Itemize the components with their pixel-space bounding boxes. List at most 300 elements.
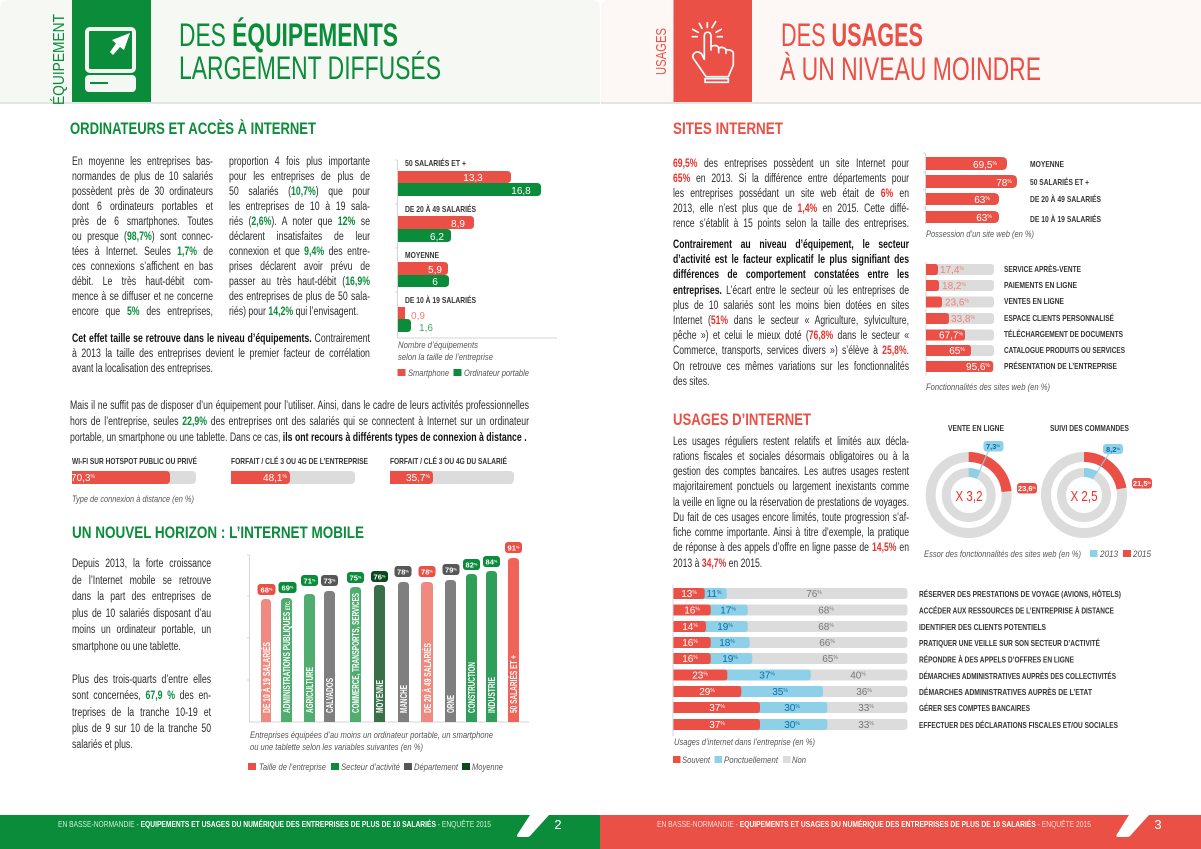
bar chart: équipements par taille: 0,9 [411,311,425,322]
row 9: % [720,721,725,727]
bar chart: fonctionnalités des sites web: % [971,315,976,321]
bar chart: possession d'un site web [923,153,1101,239]
title: équipement: DES ÉQUIPEMENTS [179,17,398,53]
row 4: 66 [819,638,830,649]
row 2: 17 [720,606,731,616]
row 6: % [861,672,866,678]
bar: commerce: % [358,574,362,580]
progress bars: connexion à distance: 48,1 [263,473,283,484]
bar chart: fonctionnalités des sites web: 65 [949,346,960,357]
text: usages d'internet [673,436,910,570]
bar: moyenne: MOYENNE [375,680,386,713]
bar: moyenne [371,571,388,722]
row 9: EFFECTUER DES DÉCLARATIONS FISCALES ET/OU SOCIALES [919,720,1118,730]
caption: Fonctionnalités des sites web (en %) [926,382,1050,392]
bar chart: équipements par taille: MOYENNE [405,250,439,260]
text: ordinateurs colonne 1: tées à Internet. Seules 1,7% de [72,246,213,258]
row 5: 65 [822,654,833,665]
bar chart: fonctionnalités des sites web: % [965,298,970,304]
row 1: 76 [806,589,817,600]
row 1: 11 [707,589,717,600]
text: effet taille [72,333,370,375]
row 9: 37 [709,720,720,731]
row 6: 40 [850,670,861,682]
footer: page 3 [600,815,1201,849]
row 8: % [720,704,725,710]
text: effet taille: avant la localisation des entreprises. [72,363,213,375]
title: usages: À UN NIVEAU MOINDRE [780,51,1041,87]
heading: ordinateurs: ORDINATEURS ET ACCÈS À INTERNET [70,119,316,138]
bar chart: fonctionnalités des sites web: SERVICE APRÈS-VENTE [1004,264,1081,274]
bar chart: fonctionnalités des sites web: % [962,282,967,288]
progress bars: connexion à distance: 35,7 [406,473,426,484]
text: ordinateurs colonne 1: près de 6 smartphones. Toutes [72,216,213,228]
caption [250,730,493,752]
text: usages d'internet: la veille en ligne ou la réservation de prestations de voyages. [673,496,909,508]
text: effet taille: Cet effet taille se retrouve dans le niveau d’équipements. Contrairement [72,333,370,345]
donut: suivi des commandes: % [1148,480,1152,485]
bar: orne [442,564,460,722]
text: usages d'internet: 2013 à 34,7% en 2015. [673,558,762,570]
row 4: 18 [719,638,730,649]
bar chart: possession d'un site web: 69,5 [973,160,993,171]
row 7: % [867,688,872,694]
text: ordinateurs colonne 2: riés (2,6%). A noter que 12% se [229,216,370,228]
bar chart: fonctionnalités des sites web: % [959,332,964,338]
bar chart: possession d'un site web: DE 10 À 19 SALARIÉS [1030,214,1101,224]
bar chart: fonctionnalités des sites web: % [986,363,991,369]
row 4 [674,637,1100,649]
text: sites internet paragraphe 2: d’activité est le facteur explicatif le plus signifiant des [673,254,909,266]
progress bars: connexion à distance: WI-FI SUR HOTSPOT PUBLIC OU PRIVÉ [72,456,197,466]
heading: usages d'internet: USAGES D’INTERNET [673,410,811,429]
bar: 50 salariés et plus: % [516,544,520,550]
title: équipement [179,17,441,86]
caption: Nombre d’équipements [398,340,478,350]
header band: équipement [0,0,600,104]
bar: administrations: % [290,584,294,590]
donut: vente en ligne: 7,3 [986,442,996,451]
text: ordinateurs colonne 2: des entreprises de plus de 50 sala- [229,291,370,303]
bar: industrie [483,556,500,722]
text: ordinateurs colonne 1: ou presque (98,7%) sont connec- [72,231,213,243]
text: équipement pour l'utiliser: portable, un smartphone ou une tablette. Dans ce cas, ils ont recours à différents types de connexion à distance . [70,432,527,444]
bar: industrie: % [494,558,498,564]
row 2: % [695,606,700,612]
text: sites internet paragraphe 2: plus de 10 salariés sont les moins bien dotées en sites [673,300,909,312]
bar: construction: 82 [466,560,474,570]
bar: 20 à 49 salariés: % [429,568,433,574]
row 5 [674,653,1074,665]
text: équipement pour l'utiliser [70,400,529,444]
text: ordinateurs colonne 1: dont 6 ordinateurs portables et [72,201,213,213]
donut: vente en ligne: X 3,2 [956,488,982,505]
row 8: % [795,704,800,710]
bar chart: équipements par taille: DE 20 À 49 SALARIÉS [405,204,476,214]
bar chart: équipements par taille: 6 [432,277,438,288]
row 3: % [829,623,834,629]
text: internet mobile paragraphe 1 [72,558,211,652]
caption: selon la taille de l’entreprise [398,352,493,362]
bar chart: fonctionnalités des sites web: ESPACE CLIENTS PERSONNALISÉ [1004,313,1114,323]
row 3 [674,621,1046,633]
bar chart: équipements par taille: 6,2 [430,232,444,243]
footer: page 2: 2 [554,817,562,832]
row 3: % [728,623,733,629]
bar: agriculture: % [312,578,316,582]
bar: industrie: 84 [486,558,494,566]
text: ordinateurs colonne 1: encore que 5% des entreprises, [72,306,213,318]
progress bars: connexion à distance: % [426,474,431,480]
text: internet mobile paragraphe 2: Plus des trois-quarts d’entre elles [72,674,211,686]
text: sites internet paragraphe 2: différences de comportement constatées entre les [673,269,909,281]
bar: calvados: 73 [324,576,332,586]
bar: 10 à 19 salariés: % [269,586,273,592]
legend: Smartphone [408,368,449,378]
row 6: % [770,672,775,678]
bar chart: possession d'un site web: % [987,214,992,220]
text: sites internet paragraphe 1: 65% en 2013. Si la différence entre départements pour [673,173,909,185]
caption [398,340,493,362]
bar: administrations: 69 [282,584,290,592]
text: internet mobile paragraphe 2 [72,674,211,751]
row 2: ACCÉDER AUX RESSOURCES DE L’ENTREPRISE À DISTANCE [919,606,1114,616]
footer: page 2 [0,815,600,849]
bar: administrations [278,582,296,722]
bar chart: fonctionnalités des sites web: TÉLÉCHARGEMENT DE DOCUMENTS [1004,329,1123,339]
text: ordinateurs colonne 1: ces connexions s’affichent en bas [72,261,213,273]
legend [673,755,806,765]
progress bars: connexion à distance: % [91,474,96,480]
text: internet mobile paragraphe 2: plus de 9 sur 10 de la tranche 50 [72,723,211,735]
row 7: % [783,688,788,694]
stacked bar chart: usages d'internet [673,585,1121,765]
title: usages [780,17,1041,87]
bar: manche: 78 [397,568,405,576]
bar chart: fonctionnalités des sites web: PAIEMENTS EN LIGNE [1004,280,1077,290]
row 1 [674,588,1121,600]
bar: 50 salariés et plus [505,542,522,722]
text: internet mobile paragraphe 1: smartphone ou une tablette. [72,640,181,652]
row 2: 68 [818,606,829,616]
bar: construction: CONSTRUCTION [467,662,478,713]
row 3: 14 [682,622,693,633]
text: ordinateurs colonne 2: connexion et que 9,4% des entre- [229,246,370,258]
text: ordinateurs colonne 1: En moyenne les entreprises bas- [72,156,213,168]
text: internet mobile paragraphe 1: plus de 10 salariés disposant d’au [72,608,211,620]
row 6: 37 [759,670,770,682]
bar: 50 salariés et plus: 50 SALARIÉS ET + [507,655,520,713]
caption: ou une tablette selon les variables suivantes (en %) [250,742,423,752]
caption: Usages d’internet dans l’entreprise (en %) [674,737,815,747]
bar: calvados [321,575,338,722]
donut: vente en ligne: % [996,443,1000,448]
bar: calvados: CALVADOS [325,678,336,713]
progress bars: connexion à distance: % [283,474,288,480]
bar: agriculture: 71 [304,576,312,586]
bar: 20 à 49 salariés [418,566,436,722]
row 1: % [717,590,722,596]
text: internet mobile paragraphe 1: Depuis 2013, la forte croissance [72,558,211,570]
text: sites internet paragraphe 1: les entreprises possédant un site web était de 6% en [673,188,909,200]
legend: Taille de l’entreprise [259,762,326,772]
bar: orne: % [453,566,457,572]
text: usages d'internet: majoritairement ponctuels ou largement inexistants comme [673,481,909,493]
row 8: % [869,704,874,710]
bar chart: fonctionnalités des sites web: 17,4 [940,265,960,276]
bar chart: possession d'un site web: % [1007,179,1012,185]
bar: commerce [347,572,364,722]
footer: page 2: EN BASSE-NORMANDIE - EQUIPEMENTS ET USAGES DU NUMÉRIQUE DES ENTREPRISES DE PLUS DE 10 SALARIÉS - ENQUÊTE 2015 [58,819,491,829]
donut: suivi des commandes: % [1116,446,1120,451]
bar chart: fonctionnalités des sites web: VENTES EN LIGNE [1004,296,1064,306]
bar chart: équipements par taille [395,158,557,378]
progress bars: connexion à distance: 70,3 [71,473,91,484]
row 9: % [795,721,800,727]
row 7: 35 [772,687,783,698]
row 1: % [817,590,822,596]
bar chart: fonctionnalités des sites web: % [960,266,965,272]
row 2 [674,604,1114,616]
legend: Ordinateur portable [464,368,529,378]
caption and legend: essor: 2013 [1099,549,1118,559]
bar: 20 à 49 salariés: DE 20 À 49 SALARIÉS [421,643,434,713]
header band: usages [601,0,1201,104]
bar chart: fonctionnalités des sites web: 67,7 [939,330,959,342]
text: usages d'internet: gestion des comptes bancaires. Les autres usages restent [673,466,909,478]
bar: orne: ORNE [446,695,457,713]
row 2: % [829,606,834,612]
row 2: 16 [684,606,695,616]
bar chart: équipements par taille: 5,9 [428,265,442,276]
caption: Type de connexion à distance (en %) [72,494,194,504]
bar chart: fonctionnalités des sites web: 18,2 [942,281,962,292]
text: ordinateurs colonne 2: 50 salariés (10,7%) que pour [229,186,370,198]
bar chart: possession d'un site web: 78 [996,178,1007,189]
bar chart: équipements par taille: DE 10 À 19 SALARIÉS [405,295,476,305]
footer: page 3: 3 [1154,817,1162,832]
text: internet mobile paragraphe 1: de l’Internet mobile se retrouve [72,574,211,586]
donut: suivi des commandes: X 2,5 [1070,488,1098,505]
row 5: RÉPONDRE À DES APPELS D’OFFRES EN LIGNE [919,654,1074,664]
legend: Souvent [682,755,710,765]
caption: Possession d’un site web (en %) [926,229,1034,239]
bar: 10 à 19 salariés: 68 [261,586,269,594]
bar chart: internet mobile [247,542,529,772]
bar chart: fonctionnalités des sites web: PRÉSENTATION DE L’ENTREPRISE [1004,361,1117,371]
bar chart: équipements par taille: 50 SALARIÉS ET + [405,158,466,168]
text: ordinateurs colonne 1 [72,156,213,318]
bar: commerce: COMMERCE, TRANSPORTS, SERVICES [351,593,362,713]
text: internet mobile paragraphe 1: moins un ordinateur portable, un [72,624,211,636]
text: sites internet paragraphe 2: entreprises. L’écart entre le secteur où les entreprises de [673,285,909,297]
row 8: 30 [784,703,795,714]
row 9: 33 [858,720,869,731]
bar chart: possession d'un site web: DE 20 À 49 SALARIÉS [1030,194,1101,204]
bar: construction [463,559,480,722]
row 1: 13 [681,589,692,600]
legend: Moyenne [472,762,503,772]
text: sites internet paragraphe 2: Commerce, transports, services divers ») s’élève à 25,8%. [673,345,909,357]
bar chart: équipements par taille: 13,3 [463,173,483,184]
text: ordinateurs colonne 2: riés) pour 14,2% qui l’envisagent. [229,306,358,318]
bar: commerce: 75 [350,574,358,582]
row 9 [674,719,1118,731]
bar chart: possession d'un site web: 50 SALARIÉS ET + [1030,177,1089,187]
side label: équipement: ÉQUIPEMENT [49,14,68,105]
donut: vente en ligne [931,423,1037,533]
bar chart: fonctionnalités des sites web: 23,6 [945,298,965,308]
row 7: 36 [856,687,867,698]
row 7 [674,686,1093,698]
donut: vente en ligne: VENTE EN LIGNE [948,423,1004,433]
text: ordinateurs colonne 1: possèdent près de 30 ordinateurs [72,186,213,198]
bar: industrie: INDUSTRIE [487,677,498,713]
donut: vente en ligne: % [1033,485,1037,490]
bar: agriculture: AGRICULTURE [305,667,316,713]
bar chart: équipements par taille: 8,9 [451,219,465,230]
row 1: RÉSERVER DES PRESTATIONS DE VOYAGE (AVIONS, HÔTELS) [919,588,1121,599]
bar: 10 à 19 salariés: DE 10 À 19 SALARIÉS [260,642,273,713]
row 9: % [869,721,874,727]
text: usages d'internet: Du fait de ces usages encore limités, toute progression s’af- [673,512,909,524]
text: ordinateurs colonne 1: normandes de plus de 10 salariés [72,171,213,183]
text: ordinateurs colonne 1: débit. Le très haut-débit com- [72,276,213,288]
bar chart: possession d'un site web: % [993,161,998,167]
row 4: % [730,639,735,645]
text: ordinateurs colonne 2: déclarent insatisfaites de leur [229,231,370,243]
text: sites internet paragraphe 2: Internet (51% dans le secteur « Agriculture, sylviculture, [673,315,909,327]
progress bars: connexion à distance [71,456,514,504]
bar: agriculture [301,575,318,722]
donut: suivi des commandes: 21,5 [1133,479,1148,488]
donut: suivi des commandes: SUIVI DES COMMANDES [1050,423,1129,433]
heading: sites internet: SITES INTERNET [673,119,783,138]
caption and legend: essor: 2015 [1132,549,1152,559]
row 5: 19 [722,654,733,665]
progress bars: connexion à distance: FORFAIT / CLÉ 3 OU 4G DU SALARIÉ [390,456,507,466]
text: sites internet paragraphe 1 [673,158,909,230]
text: effet taille: à 2013 la taille des entreprises devient le premier facteur de corrélation [72,348,370,360]
heading: internet mobile: UN NOUVEL HORIZON : L’INTERNET MOBILE [72,523,364,542]
bar chart: équipements par taille: 1,6 [419,323,433,334]
bar: calvados: % [332,578,336,582]
bar: orne: 79 [445,566,453,574]
row 8: 37 [709,703,720,714]
legend [248,762,503,772]
bar chart: possession d'un site web: MOYENNE [1030,159,1064,169]
text: sites internet paragraphe 1: 2013, elle n’est plus que de 1,4% en 2015. Cette diffé- [673,203,909,215]
bar: construction: % [474,562,478,566]
bar chart: fonctionnalités des sites web: % [960,347,965,353]
bar chart: possession d'un site web: % [985,196,990,202]
legend: Secteur d’activité [341,762,400,772]
text: usages d'internet: fiche comme importante. Ainsi à titre d’exemple, la pratique [673,527,909,539]
row 7: DÉMARCHES ADMINISTRATIVES AUPRÈS DE L’ETAT [919,687,1093,697]
bar: manche: MANCHE [399,685,410,713]
row 9: 30 [784,720,795,731]
legend: Non [792,755,806,765]
bar chart: possession d'un site web: 63 [976,213,987,224]
donut: suivi des commandes [1046,423,1152,533]
legend: Département [414,762,458,772]
row 6: % [703,672,708,678]
text: internet mobile paragraphe 2: treprises de la tranche 10-19 et [72,707,211,719]
bar chart: fonctionnalités des sites web [926,262,1125,392]
row 7: 29 [699,687,710,698]
row 6: 23 [692,670,703,682]
bar: moyenne: % [382,574,386,578]
bar: manche [394,566,412,722]
row 5: 16 [682,654,693,665]
title: usages: DES USAGES [781,17,923,53]
row 2: % [731,606,736,612]
text: sites internet paragraphe 2: des sites. [673,376,709,388]
text: internet mobile paragraphe 2: sont concernées, 67,9 % des en- [72,690,211,702]
text: sites internet paragraphe 2 [673,239,909,388]
row 5: % [693,655,698,661]
text: sites internet paragraphe 1: 69,5% des entreprises possèdent un site Internet pour [673,158,909,170]
text: ordinateurs colonne 2 [229,156,370,318]
row 8: GÉRER SES COMPTES BANCAIRES [919,703,1030,713]
row 8: 33 [858,703,869,714]
legend [398,368,529,378]
text: sites internet paragraphe 1: rence s’établit à 15 points selon la taille des entreprises. [673,218,909,230]
progress bars: connexion à distance: FORFAIT / CLÉ 3 OU 4G DE L’ENTREPRISE [231,456,368,466]
row 5: % [833,655,838,661]
text: équipement pour l'utiliser: Mais il ne suffit pas de disposer d’un équipement pour l’utiliser. Ainsi, dans le cadre de leurs activités professionnelles [70,400,529,412]
row 7: % [710,688,715,694]
row 3: 19 [717,622,728,633]
icon: computer with cursor [72,0,151,102]
text: usages d'internet: Les usages réguliers restent relatifs et limités aux décla- [673,436,909,448]
text: internet mobile paragraphe 1: dans la part des entreprises de [72,591,211,603]
row 8 [674,702,1030,714]
text: ordinateurs colonne 1: mence à se diffuser et ne concerne [72,291,213,303]
footer: page 3: EN BASSE-NORMANDIE - EQUIPEMENTS ET USAGES DU NUMÉRIQUE DES ENTREPRISES DE PLUS DE 10 SALARIÉS - ENQUÊTE 2015 [657,819,1091,829]
row 4: 16 [682,638,693,649]
legend: Ponctuellement [724,755,778,765]
text: ordinateurs colonne 2: pour les entreprises de plus de [229,171,370,183]
row 4: % [830,639,835,645]
row 3: IDENTIFIER DES CLIENTS POTENTIELS [919,622,1046,632]
bar chart: possession d'un site web: 63 [974,195,985,206]
row 6: DÉMARCHES ADMINISTRATIVES AUPRÈS DES COLLECTIVITÉS [919,671,1116,681]
bar: moyenne: 76 [374,572,382,582]
row 3: % [693,623,698,629]
text: sites internet paragraphe 2: On retrouve ces mêmes variations sur les fonctionnalités [673,361,909,373]
bar chart: fonctionnalités des sites web: 33,8 [951,314,971,325]
donut: vente en ligne: 23,6 [1018,484,1033,493]
text: équipement pour l'utiliser: hors de l’entreprise, seules 22,9% des entreprises ont des salariés qui se connectent à Internet sur un ordinateur [70,416,529,428]
text: ordinateurs colonne 2: proportion 4 fois plus importante [229,156,370,168]
bar: 50 salariés et plus: 91 [508,544,516,552]
text: ordinateurs colonne 2: prises déclarent avoir prévu de [229,261,370,273]
row 4: PRATIQUER UNE VEILLE SUR SON SECTEUR D’ACTIVITÉ [919,638,1100,648]
text: ordinateurs colonne 2: les entreprises de 10 à 19 sala- [229,201,370,213]
row 6 [674,670,1116,682]
text: ordinateurs colonne 2: passer au très haut-débit (16,9% [229,276,370,288]
icon: pointing hand [674,0,752,102]
donut: suivi des commandes: 8,2 [1106,445,1116,454]
bar: manche: % [405,568,409,574]
text: internet mobile paragraphe 2: salariés et plus. [72,739,133,751]
row 4: % [693,639,698,645]
text: sites internet paragraphe 2: pêche ») et celui le mieux doté (76,8% dans le secteur « [673,330,909,342]
bar: 10 à 19 salariés [258,584,276,722]
bar chart: équipements par taille: 16,8 [511,186,531,197]
bar: administrations: ADMINISTRATIONS PUBLIQUES ETC. [282,601,293,713]
